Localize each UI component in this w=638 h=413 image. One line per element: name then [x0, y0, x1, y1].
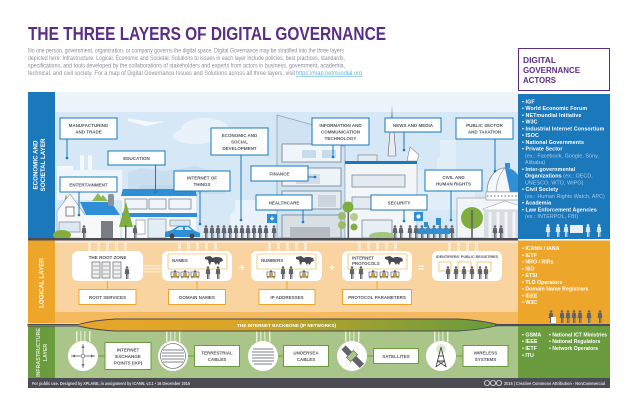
panel: numbers	[251, 251, 322, 281]
label: public sector and taxation: AND TAXATION	[468, 130, 501, 134]
panel: logical actors list: • IEEE	[522, 293, 538, 299]
panel: logical actors list: • ISO	[522, 266, 534, 272]
panel: internet protocols	[342, 251, 412, 281]
label: wireless systems: SYSTEMS	[475, 357, 496, 362]
label: internet exchange points: EXCHANGE	[115, 354, 141, 359]
illustration: car	[165, 226, 200, 238]
panel: logical actors list: • Domain Name Registrars	[522, 286, 588, 292]
panel: logical actors list: • IETF	[522, 253, 538, 259]
panel: logical actors list	[518, 240, 610, 324]
icon: satellite	[337, 341, 367, 371]
panel: economic actors list: • Civil Society	[522, 187, 558, 193]
panel: logical actors list: • TLD Operators	[522, 280, 562, 286]
panel: internet protocols: INTERNET	[352, 256, 374, 260]
footer bar: For public use. Designed by XPLANE, in assignment by ICANN. v2.1 • 16 December 2015	[32, 381, 190, 386]
panel: infrastructure actors list: • Network Operators	[549, 346, 598, 352]
illustration: people on orange	[549, 310, 602, 323]
icon: undersea cables	[248, 341, 278, 371]
label: internet of things: THINGS	[193, 182, 211, 187]
divider bar	[495, 324, 610, 326]
logical labels	[79, 281, 412, 304]
panel: logical layer	[28, 240, 518, 324]
label: finance	[251, 166, 316, 181]
label: information and communication technology	[312, 118, 369, 158]
plus sign: +	[239, 263, 245, 274]
panel: infrastructure layer	[28, 325, 518, 378]
panel: economic actors list: • IGF	[522, 99, 535, 105]
layer tab: infrastructure: INFRASTRUCTURE	[36, 328, 42, 377]
label: protocol parameters: PROTOCOL PARAMETERS	[348, 295, 406, 300]
panel: infrastructure actors list: • ITU	[522, 353, 534, 359]
panel: economic actors list: • Inter-governmental	[522, 167, 576, 173]
panel: logical actors list: • NRO / RIRs	[522, 260, 554, 266]
layer tab: economic and societal	[28, 92, 55, 239]
label: information and communication technology: TECHNOLOGY	[325, 136, 356, 141]
internet backbone band: THE INTERNET BACKBONE (IP NETWORKS)	[237, 323, 336, 329]
label: domain names: DOMAIN NAMES	[179, 295, 215, 300]
label: economic and social development: DEVELOPMENT	[222, 146, 257, 151]
panel: identifiers public registries: IDENTIFIERS' PUBLIC REGISTRIES	[436, 255, 499, 259]
economic labels	[60, 118, 513, 225]
label: satellites	[367, 348, 418, 364]
label: information and communication technology: INFORMATION AND	[319, 123, 362, 128]
illustration: medical sign	[267, 214, 277, 223]
layer tab: infrastructure	[28, 325, 55, 378]
panel: infrastructure actors list: • GSMA	[522, 332, 541, 338]
panel: infrastructure actors list: • IEEE	[522, 339, 538, 345]
panel: economic actors list: • NETmundial Initiative	[522, 113, 582, 119]
panel: logical actors list: • W3C	[522, 300, 537, 306]
title: THE THREE LAYERS OF DIGITAL GOVERNANCE	[28, 23, 386, 44]
label: education	[108, 151, 165, 193]
intro text: technical, and civil society. For a map of Digital Governance Issues and Solutions across all three layers, visit	[28, 70, 295, 77]
panel: names: NAMES	[172, 258, 188, 263]
panel: economic actors list: • ISOC	[522, 133, 539, 139]
label: manufacturing and trade: MANUFACTURING	[69, 123, 109, 128]
panel: economic actors list: Alibaba)	[525, 160, 545, 166]
label: undersea cables: CABLES	[297, 357, 315, 362]
panel: economic actors list: • Law Enforcement Agencies	[522, 207, 597, 213]
panel: economic actors list: • W3C	[522, 120, 538, 126]
infrastructure labels	[98, 342, 508, 370]
panel: economic actors list	[518, 94, 610, 239]
illustration: people on blue	[546, 224, 601, 237]
label: education: EDUCATION	[123, 156, 150, 161]
heading: digital governance actors: ACTORS	[523, 76, 557, 85]
intro text: depicted here: Infrastructure, Logical, Economic and Societal. Solutions to issues in each layer include policies, best practices, standards,	[28, 55, 345, 62]
illustration: capitol building	[457, 163, 523, 238]
icon: creative commons badges	[484, 380, 502, 386]
layer tab: logical: LOGICAL LAYER	[38, 258, 46, 308]
panel: infrastructure actors list: • National Regulators	[549, 339, 600, 345]
intro text: specifications, and tools developed by the collaborations of stakeholders and experts from actors in business, government, academia,	[28, 62, 345, 70]
label: domain names	[168, 281, 226, 304]
panel: infrastructure actors list: • National ICT Ministries	[549, 332, 607, 338]
illustration: crowd of people	[204, 225, 276, 238]
equals sign: =	[418, 263, 424, 274]
label: internet of things	[174, 171, 230, 225]
panel: economic actors list: Organizations (ex.: OECD,	[525, 174, 593, 180]
label: civil and human rights	[425, 170, 482, 221]
label: economic and social development	[211, 128, 268, 221]
footer bar: 2015 | Creative Commons Attribution - NonCommercial	[504, 381, 605, 386]
label: healthcare: HEALTHCARE	[269, 200, 299, 206]
label: finance: FINANCE	[270, 172, 290, 176]
panel: infrastructure actors list: • IETF	[522, 346, 538, 352]
illustration: media building and tower	[345, 105, 419, 240]
panel: economic actors list: • World Economic Forum	[522, 106, 587, 112]
label: wireless systems	[456, 346, 508, 366]
illustration: house	[53, 193, 120, 240]
footer bar	[28, 378, 610, 388]
label: ip addresses: IP ADDRESSES	[270, 295, 304, 300]
label: entertainment: ENTERTAINMENT	[69, 182, 108, 188]
icon: wireless tower	[426, 341, 456, 371]
label: civil and human rights: CIVIL AND	[442, 175, 465, 180]
background clouds and skyline	[57, 118, 475, 238]
label: public sector and taxation: PUBLIC SECTOR	[466, 123, 504, 128]
illustration: protesters	[393, 218, 462, 238]
panel: identifiers public registries	[432, 251, 502, 281]
label: root services: ROOT SERVICES	[89, 295, 126, 300]
plus sign: +	[329, 263, 335, 274]
layer tab: infrastructure: LAYER	[43, 344, 49, 361]
label: economic and social development: ECONOMIC AND	[222, 133, 258, 138]
panel: numbers: NUMBERS	[261, 258, 283, 263]
panel: economic and societal layer	[28, 92, 523, 240]
panel: the root zone	[72, 251, 143, 281]
heading: digital governance actors: GOVERNANCE	[523, 66, 581, 75]
heading: digital governance actors: DIGITAL	[523, 56, 556, 65]
label: civil and human rights: HUMAN RIGHTS	[436, 182, 471, 186]
label: internet exchange points: POINTS (IXP)	[114, 360, 143, 366]
panel: internet protocols: PROTOCOLS	[352, 261, 380, 266]
illustration: trees	[338, 202, 358, 238]
label: satellites: SATELLITES	[382, 354, 410, 359]
label: news and media: NEWS AND MEDIA	[393, 123, 434, 128]
label: terrestrial cables	[188, 346, 240, 366]
label: economic and social development: SOCIAL	[231, 140, 248, 144]
label: public sector and taxation	[456, 118, 513, 172]
panel: economic actors list: • Private Sector	[522, 146, 563, 152]
icon: internet exchange point	[68, 341, 98, 371]
label: security	[371, 195, 427, 222]
label: internet exchange points: INTERNET	[117, 348, 140, 352]
connector stripes	[88, 243, 478, 272]
panel: economic actors list: (ex.: INTERPOL, FBI)	[525, 214, 578, 220]
label: internet exchange points	[98, 342, 151, 370]
panel: the root zone: THE ROOT ZONE	[89, 255, 126, 260]
label: information and communication technology: COMMUNICATION	[321, 130, 360, 134]
illustration: office tower	[277, 115, 345, 238]
label: terrestrial cables: CABLES	[208, 357, 226, 362]
panel: logical actors list: • ETSI	[522, 273, 538, 279]
label: ip addresses	[259, 281, 315, 304]
internet backbone band	[28, 319, 500, 331]
intro text: https://map.netmundial.org	[296, 70, 362, 77]
illustration: school	[119, 189, 197, 238]
label: manufacturing and trade	[60, 118, 117, 159]
label: undersea cables	[278, 346, 328, 366]
panel: economic actors list: (ex.: Facebook, Google, Sony,	[525, 153, 599, 159]
label: news and media	[385, 118, 441, 151]
panel: names	[162, 251, 232, 281]
label: undersea cables: UNDERSEA	[293, 350, 319, 356]
heading: digital governance actors	[518, 48, 610, 90]
label: protocol parameters	[342, 281, 412, 304]
label: root services	[79, 281, 136, 304]
panel: logical actors list: • ICANN / IANA	[522, 246, 560, 252]
illustration: camera sign	[414, 212, 423, 221]
panel: economic actors list: • Industrial Internet Consortium	[522, 126, 605, 132]
icon: terrestrial cables	[158, 341, 188, 371]
label: security: SECURITY	[388, 200, 410, 206]
label: internet of things: INTERNET OF	[187, 176, 217, 180]
label: entertainment	[60, 177, 117, 216]
layer tab: logical	[28, 240, 55, 324]
panel: economic actors list: • Academia	[522, 200, 551, 206]
intro text: No one person, government, organization, or company governs the digital space. Digital Governance may be stratified into the three layers	[28, 48, 344, 54]
label: terrestrial cables: TERRESTRIAL	[201, 350, 233, 356]
label: healthcare	[256, 195, 312, 223]
label: manufacturing and trade: AND TRADE	[75, 130, 102, 134]
panel: infrastructure actors list	[518, 326, 610, 378]
panel: economic actors list: UNESCO, WTO, WIPO)	[525, 180, 584, 186]
layer tab: economic and societal: ECONOMIC AND	[32, 140, 40, 189]
panel: economic actors list: • National Governments	[522, 140, 584, 146]
ground line	[28, 238, 518, 240]
layer tab: economic and societal: SOCIETAL LAYER	[40, 138, 47, 191]
connector stripes	[76, 331, 448, 342]
intro text	[28, 48, 362, 77]
label: wireless systems: WIRELESS	[474, 350, 497, 356]
panel: economic actors list: (ex.: Human Rights Watch, APC)	[525, 194, 605, 200]
